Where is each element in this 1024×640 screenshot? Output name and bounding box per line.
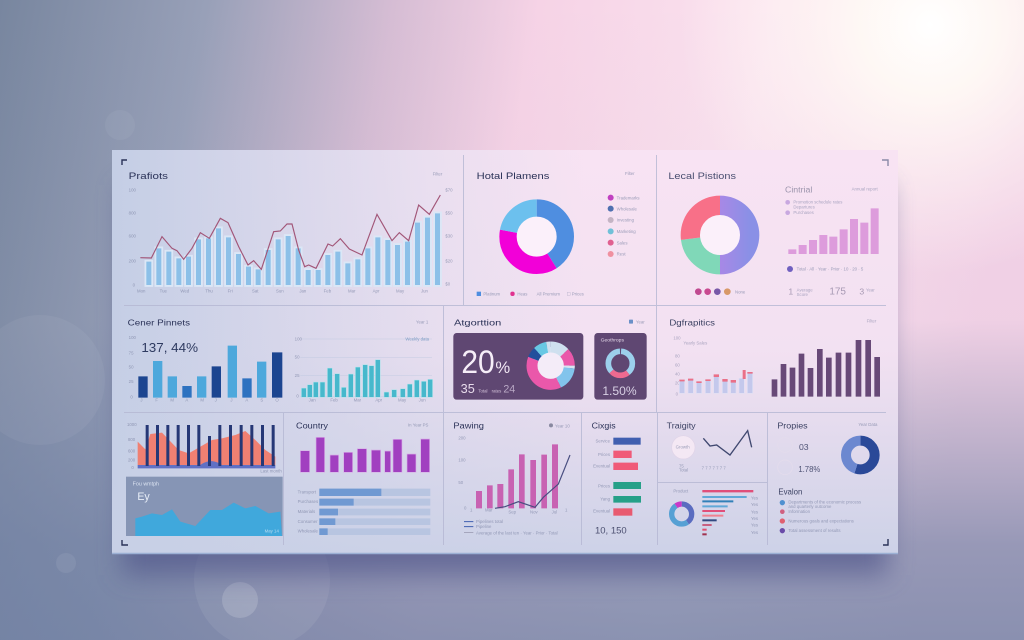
bullets: and quarterly outcome <box>788 504 832 509</box>
sub legend: Annual report <box>852 187 878 192</box>
tick labels: 7 7 7 7 7 7 7 <box>702 465 726 470</box>
axis labels: Jul <box>552 509 557 514</box>
blue area card: Ey <box>137 491 150 503</box>
metrics: 3 <box>859 286 864 296</box>
horizontal bars: Service <box>596 439 611 444</box>
ranked bars: Yes <box>751 495 758 500</box>
heading: Propies <box>777 420 808 430</box>
axis labels: $30 <box>445 234 453 239</box>
teal chart: Mar <box>354 398 362 403</box>
stacked bars: 0 <box>676 392 679 397</box>
card: 20 percent: 35 <box>461 382 475 396</box>
axis labels: J <box>140 398 143 403</box>
line <box>495 455 570 508</box>
total: 10, 150 <box>595 526 627 536</box>
horizontal bars: Eventual <box>593 464 610 469</box>
stats: 03 <box>799 442 809 452</box>
panel: lower left charts: In Year PS <box>408 423 429 428</box>
blue area card: Fou wmtph <box>133 481 159 487</box>
axis labels: $70 <box>445 187 453 192</box>
donut chart <box>846 441 875 469</box>
metrics: 1 <box>788 286 793 296</box>
donut chart <box>532 347 569 384</box>
legend: Average of the last ten · Year · Prior · Total <box>476 530 558 535</box>
card: 20 percent: 24 <box>503 383 515 395</box>
corner marks <box>122 160 888 545</box>
stats: 1.78% <box>798 465 820 474</box>
panel: donut totals <box>477 171 879 297</box>
ranked bars: Yes <box>751 516 758 521</box>
bullets: Information <box>788 509 811 514</box>
axis labels: 200 <box>458 435 466 440</box>
stacked bars: 100 <box>673 336 681 341</box>
teal chart: Feb <box>330 398 338 403</box>
stacked bars: 20 <box>675 380 680 385</box>
axis labels: 1 <box>470 508 473 513</box>
bottom legend: Heas <box>517 292 527 297</box>
teal chart: 100 <box>295 336 302 341</box>
stacked bars: 60 <box>675 363 680 368</box>
teal chart <box>295 336 432 403</box>
line chart <box>703 431 752 455</box>
axis labels: A <box>185 398 188 403</box>
teal chart: May <box>398 398 407 403</box>
panel: lower left charts <box>126 420 430 536</box>
filter label: Year <box>636 319 645 324</box>
axis labels: F <box>155 398 158 403</box>
sub legend: Promotion schedule rates <box>793 199 842 204</box>
axis labels: 100 <box>458 458 466 463</box>
panel: pawing and cargo <box>453 420 641 536</box>
axis labels: 100 <box>129 335 136 340</box>
axis labels: S <box>260 398 263 403</box>
area with bars <box>127 422 282 474</box>
axis labels: J <box>230 398 233 403</box>
gauge: Growth <box>676 445 690 450</box>
bars <box>146 213 440 285</box>
axis labels: 200 <box>129 258 136 263</box>
bullets: Total assessment of results <box>788 528 841 533</box>
axis labels: 0 <box>464 506 467 511</box>
axis labels: Nov <box>530 509 539 514</box>
purple bars <box>300 437 430 472</box>
axis labels: 600 <box>129 234 136 239</box>
bullets: Numerous goals and expectations <box>788 519 854 524</box>
card: 20 percent: % <box>495 358 510 377</box>
heading: Pawing <box>453 420 484 430</box>
ranked bars: Yes <box>751 523 758 528</box>
axis labels: M <box>170 398 174 403</box>
heading: Cener Pinnets <box>128 318 191 328</box>
axis labels: Mar <box>348 289 356 294</box>
bars <box>476 444 558 508</box>
axis labels: A <box>245 398 248 403</box>
gauge: Total <box>679 467 688 472</box>
teal chart: 0 <box>296 394 299 399</box>
card: 20 percent: Total <box>478 388 488 393</box>
bar chart <box>772 340 880 397</box>
axis labels: 0 <box>133 283 136 288</box>
panel: adoption: Filter <box>867 318 877 323</box>
progress bars: Consumer <box>298 519 318 524</box>
area with bars: 200 <box>128 458 136 463</box>
sub legend: Departures <box>793 204 815 209</box>
axis labels: 0 <box>130 394 133 399</box>
dashboard panel <box>112 150 898 554</box>
teal chart: Jan <box>309 398 316 403</box>
heading: Lecal Pistions <box>668 171 736 181</box>
card: 20 percent: 20 <box>461 343 495 380</box>
metrics: Total · All · Year · Prior · 10 · 20 · 5 <box>797 267 864 272</box>
panel: adoption <box>453 318 880 400</box>
bottom legend <box>477 292 584 297</box>
axis labels: O <box>275 398 279 403</box>
stats <box>778 438 820 475</box>
axis labels: 75 <box>129 350 134 355</box>
axis labels <box>129 335 279 403</box>
ranked bars: Yes <box>751 530 758 535</box>
legend <box>608 195 640 257</box>
legend: Investing <box>617 218 635 223</box>
metrics <box>787 266 875 297</box>
horizontal bars: Prices <box>598 452 610 457</box>
area with bars: 600 <box>128 448 136 453</box>
axis labels: Mon <box>137 289 146 294</box>
filter label <box>629 319 645 324</box>
axis labels: Sat <box>252 289 259 294</box>
axis labels: $0 <box>445 281 451 286</box>
heading: Dgfrapitics <box>669 318 716 328</box>
panel: donut totals: Filter <box>625 171 635 176</box>
legend: Trademarks <box>617 196 640 201</box>
panel: pawing and cargo: Year 10 <box>555 423 570 428</box>
axis labels: 50 <box>458 480 464 485</box>
heading: Traigity <box>667 420 696 430</box>
heading: Cixgis <box>592 420 616 430</box>
legend: Pipelines total <box>476 519 503 524</box>
progress bars: Materials <box>298 509 315 514</box>
progress bars <box>298 489 430 535</box>
axis labels: Wed <box>180 289 190 294</box>
axis labels: Feb <box>324 289 332 294</box>
teal chart: 25 <box>295 373 300 378</box>
axis labels: Jan <box>299 289 307 294</box>
donut chart: Product <box>673 489 689 494</box>
stacked bars: 80 <box>675 354 680 359</box>
donut chart <box>672 489 692 524</box>
heading: Evalon <box>778 486 803 496</box>
legend: Pipeline <box>476 524 492 529</box>
panel shadow <box>122 185 888 575</box>
panel: center planets <box>128 318 432 403</box>
axis labels <box>458 435 568 514</box>
axis labels: Fri <box>228 289 233 294</box>
card: small donut: Geothrops <box>601 338 624 344</box>
area with bars: 0 <box>131 465 134 470</box>
sub legend: Purchases <box>793 210 814 215</box>
axis labels: M <box>200 398 204 403</box>
card: small donut <box>594 333 647 400</box>
card: 20 percent <box>453 333 583 400</box>
heading: Atgorttion <box>454 318 502 328</box>
panel: trajectory and profiles: Year Data <box>858 422 878 427</box>
donut chart <box>508 208 565 265</box>
area with bars: 1000 <box>127 422 137 427</box>
horizontal bars: Eventual <box>593 509 610 514</box>
axis labels: 25 <box>129 379 134 384</box>
panel: trajectory and profiles <box>667 420 878 535</box>
horizontal bars: Prices <box>598 483 610 488</box>
bullets <box>780 499 861 533</box>
ranked bars: Yes <box>751 509 758 514</box>
legend: Marketing <box>617 229 636 234</box>
color dots: None <box>735 289 746 294</box>
legend: Rest <box>617 252 626 257</box>
ranked bars: Yes <box>751 502 758 507</box>
heading: Hotal Plamens <box>477 171 550 181</box>
axis labels: 50 <box>129 364 134 369</box>
sub legend <box>785 187 878 215</box>
stacked bars: 40 <box>675 372 680 377</box>
legend: Wholesale <box>617 207 637 212</box>
color dots <box>695 288 746 295</box>
legend <box>464 519 558 535</box>
teal chart: Weekly data <box>405 336 430 341</box>
axis labels: Mar <box>485 508 493 513</box>
blue area card: May 14 <box>265 529 279 534</box>
ranked bars <box>702 490 758 535</box>
panel: center planets: Year 1 <box>416 320 429 325</box>
axis labels: Filter <box>433 171 443 176</box>
teal chart: Jun <box>419 398 426 403</box>
axis labels: 800 <box>129 211 136 216</box>
axis labels: May <box>396 289 405 294</box>
progress bars: Wholesale <box>298 529 318 534</box>
axis labels: Tue <box>160 289 168 294</box>
teal chart: 50 <box>295 355 300 360</box>
sub heading: Cintrial <box>785 185 813 194</box>
card: 20 percent: rates <box>492 388 501 393</box>
axis labels: 100 <box>129 187 136 192</box>
axis labels: Sep <box>508 509 517 514</box>
metrics: Score <box>797 292 809 297</box>
panel: profits chart <box>129 171 453 294</box>
progress bars: Purchases <box>298 499 318 504</box>
metrics: 175 <box>829 286 846 297</box>
area with bars: Last month <box>260 469 282 474</box>
axis labels: Jun <box>421 289 429 294</box>
stacked bars: Yearly Sales <box>683 340 707 345</box>
metrics: Average <box>797 288 813 293</box>
blue area card <box>126 477 283 536</box>
area with bars: 800 <box>128 437 136 442</box>
bottom legend: All Premium <box>537 292 560 297</box>
card: small donut: 1.50% <box>602 384 637 398</box>
bullets: Departments of the economic process <box>788 499 861 504</box>
heading: Prafiots <box>129 171 168 181</box>
teal chart: Apr <box>375 398 383 403</box>
horizontal bars <box>593 438 641 516</box>
axis labels: 1 <box>565 508 568 513</box>
bar chart <box>788 208 879 254</box>
axis labels: Apr <box>373 289 380 294</box>
trend line <box>140 195 440 269</box>
axis labels: $50 <box>445 211 453 216</box>
heading: Country <box>296 420 329 430</box>
axis labels: Sun <box>276 289 284 294</box>
progress bars: Transport <box>298 489 317 494</box>
metrics: Year <box>866 288 875 293</box>
legend: Sales <box>617 240 627 245</box>
axis labels <box>129 171 453 294</box>
horizontal bars: Yang <box>600 497 611 502</box>
bottom legend: ☐ Prices <box>567 292 584 297</box>
axis labels: $20 <box>445 258 453 263</box>
bottom legend: Platinum <box>483 292 501 297</box>
donut chart <box>690 205 750 265</box>
axis labels: J <box>215 398 217 403</box>
axis labels: Thu <box>205 289 213 294</box>
gauge <box>672 436 695 472</box>
stacked bars <box>673 336 753 397</box>
big number: 137, 44% <box>141 341 198 355</box>
bars <box>138 346 282 398</box>
gauge: 75 <box>679 463 684 468</box>
